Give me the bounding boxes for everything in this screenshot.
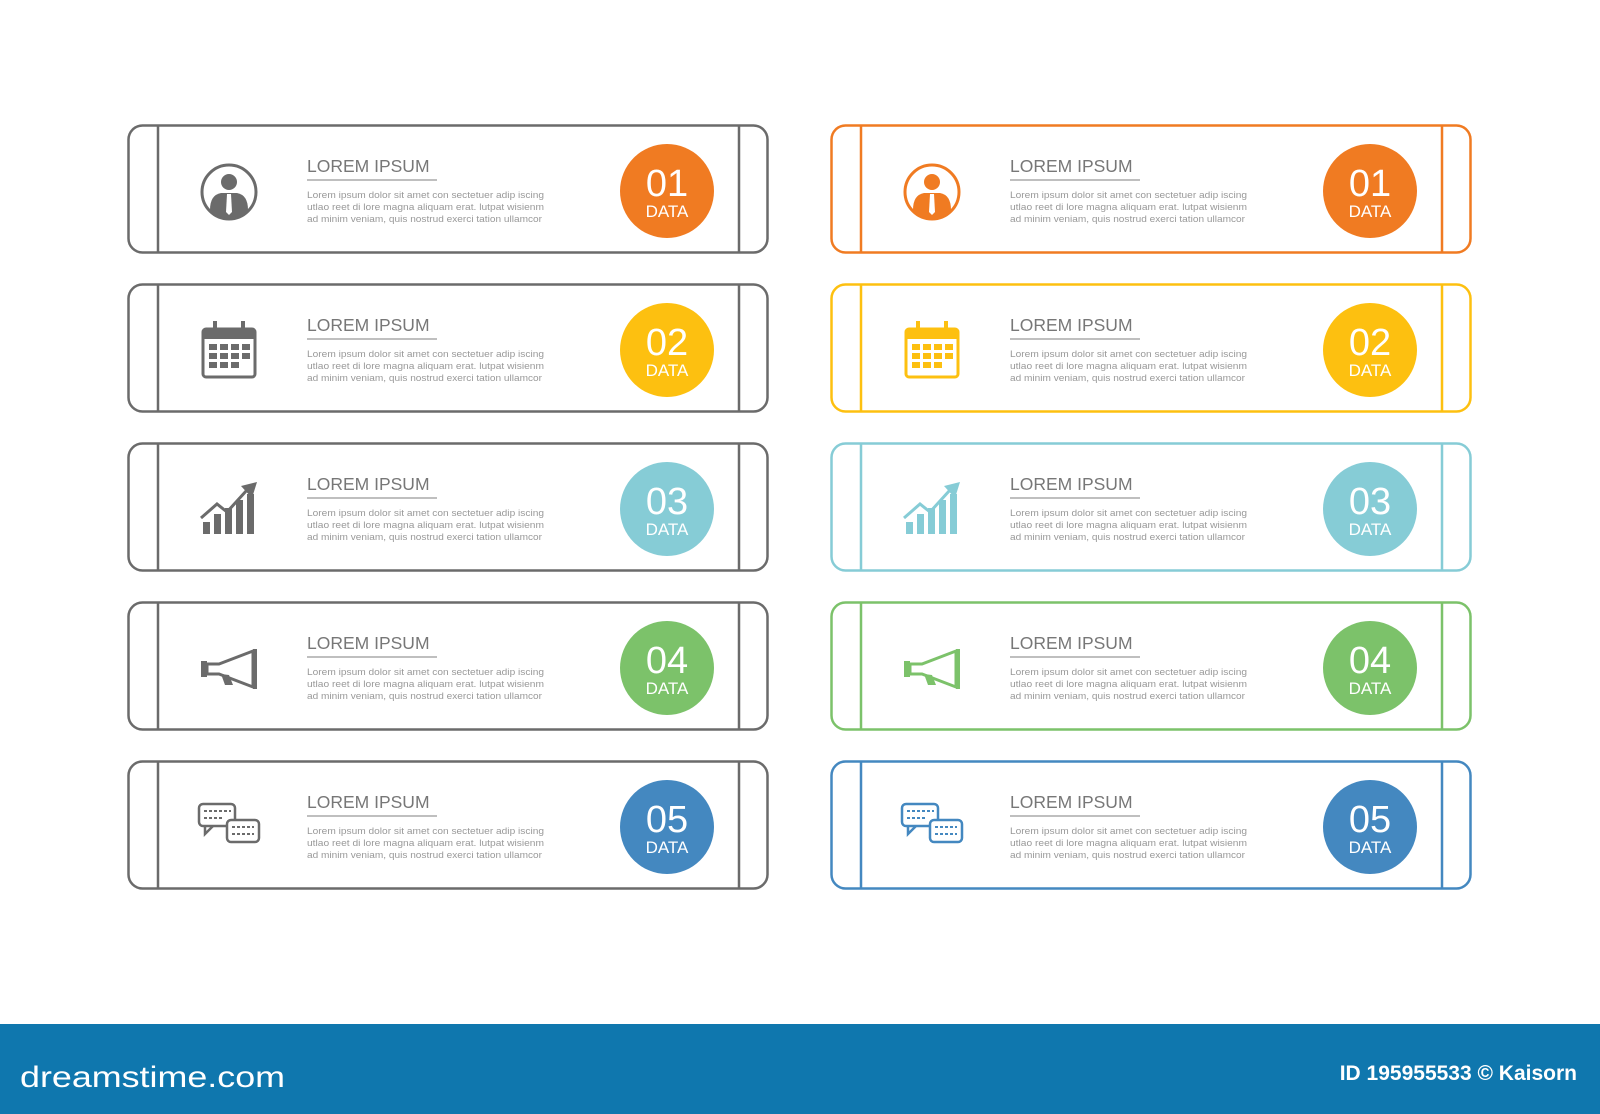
card: left 01: 01	[646, 163, 688, 205]
card: right 02: DATA	[1349, 361, 1392, 380]
card: right 04: 04	[1349, 640, 1391, 682]
card: right 05: DATA	[1349, 838, 1392, 857]
card: right 02	[832, 284, 1470, 412]
logo text: dreamstime.com	[20, 1061, 285, 1094]
card: right 01: 01	[1349, 163, 1391, 205]
footer banner	[0, 1024, 1600, 1114]
card: right 03: DATA	[1349, 520, 1392, 539]
panel: right column	[832, 126, 1470, 888]
card: left 04: DATA	[646, 679, 689, 698]
card: left 02: 02	[646, 322, 688, 364]
card: right 01	[832, 126, 1470, 252]
card: left 04	[128, 602, 768, 730]
card: left 05: DATA	[646, 838, 689, 857]
card: right 05: 05	[1349, 799, 1391, 841]
card: left 03: DATA	[646, 520, 689, 539]
card: left 03	[128, 444, 768, 570]
card: left 05	[128, 762, 768, 888]
card: right 03	[832, 444, 1470, 570]
card: right 01: DATA	[1349, 202, 1392, 221]
card: left 01: DATA	[646, 202, 689, 221]
card: left 02	[128, 284, 768, 412]
panel: left column	[128, 126, 768, 888]
card: left 01	[128, 126, 768, 252]
card: left 03: 03	[646, 481, 688, 523]
card: left 04: 04	[646, 640, 688, 682]
card: left 02: DATA	[646, 361, 689, 380]
card: right 03: 03	[1349, 481, 1391, 523]
card: right 04: DATA	[1349, 679, 1392, 698]
credit text: ID 195955533 © Kaisorn	[1340, 1062, 1577, 1085]
card: left 05: 05	[646, 799, 688, 841]
card: right 04	[832, 602, 1470, 730]
card: right 05	[832, 762, 1470, 888]
card: right 02: 02	[1349, 322, 1391, 364]
